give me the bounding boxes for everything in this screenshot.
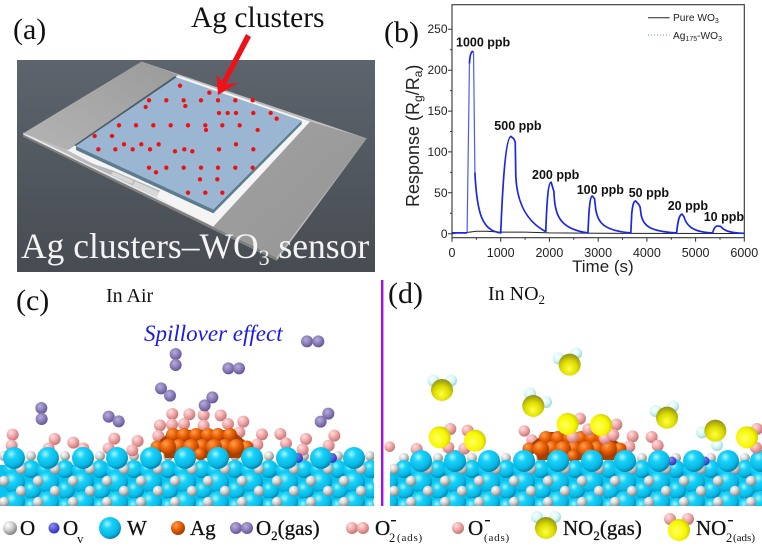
panel label: (c): (c) xyxy=(16,284,49,317)
panel: sensor device xyxy=(17,60,375,272)
y axis title: g xyxy=(411,95,425,102)
lower edge strip xyxy=(70,156,160,197)
adsorbed NO2 molecules xyxy=(429,413,762,455)
y tick labels: 200 xyxy=(427,63,448,77)
substrate xyxy=(67,75,310,227)
x tick labels: 3000 xyxy=(584,246,612,260)
NO2 gas molecules xyxy=(427,347,726,451)
x axis title: Time (s) xyxy=(572,257,634,276)
red Ag cluster dots xyxy=(92,83,279,195)
y axis title: /R xyxy=(403,77,423,95)
WO3 lattice xyxy=(0,447,374,506)
y tick labels: 50 xyxy=(434,186,448,200)
divider: purple line xyxy=(381,280,383,506)
y axis title: a xyxy=(411,70,425,77)
legend item: O adsorbed: (ads) xyxy=(484,532,510,544)
concentration labels: 20 ppb xyxy=(668,199,708,213)
panel label: (b): (b) xyxy=(384,16,419,49)
legend item: NO2 gas xyxy=(531,511,642,543)
legend item: O adsorbed xyxy=(452,516,510,544)
sensor caption: sensor xyxy=(270,226,369,266)
chart legend: Ag xyxy=(673,31,685,42)
sensor caption: Ag clusters–WO xyxy=(21,226,259,266)
chart legend: -WO xyxy=(697,31,718,42)
adsorbed O2 on surface xyxy=(6,408,340,456)
x tick labels: 1000 xyxy=(487,246,515,260)
sensing layer side xyxy=(76,121,302,213)
WO3 lattice back row xyxy=(399,453,750,461)
concentration labels: 1000 ppb xyxy=(456,36,511,50)
chart legend: 3 xyxy=(718,36,722,43)
legend item: O2 gas xyxy=(230,516,320,543)
heading: In Air: In Air xyxy=(106,285,154,307)
concentration labels: 50 ppb xyxy=(629,186,669,200)
annotation: Spillover effect: Spillover effect xyxy=(144,321,283,346)
legend item: NO2 gas: (gas) xyxy=(600,516,642,540)
x tick labels: 2000 xyxy=(535,246,563,260)
legend item: O2 gas: 2 xyxy=(271,528,278,543)
concentration labels xyxy=(456,36,744,224)
right electrode pad xyxy=(213,122,367,257)
y tick labels: 150 xyxy=(427,104,448,118)
left electrode pad xyxy=(23,62,178,150)
legend item: O: O xyxy=(20,516,35,540)
chart legend: Pure WO xyxy=(673,13,715,24)
Ag cluster xyxy=(150,428,254,460)
legend item: NO2 adsorbed: (ads) xyxy=(733,532,755,544)
legend item: NO2 adsorbed: NO xyxy=(696,516,726,540)
panel: surface in air xyxy=(0,335,374,506)
chart legend: 3 xyxy=(715,18,719,25)
x tick labels: 5000 xyxy=(682,246,710,260)
y tick labels: 100 xyxy=(427,145,448,159)
legend item: O2 adsorbed: (ads) xyxy=(397,532,423,544)
WO3 lattice back row xyxy=(0,451,375,461)
legend item: O xyxy=(3,516,35,540)
concentration labels: 200 ppb xyxy=(532,168,580,182)
y tick labels xyxy=(427,22,448,241)
concentration labels: 10 ppb xyxy=(704,210,744,224)
arrow: Ag clusters pointer xyxy=(216,34,251,95)
Ag cluster xyxy=(522,431,626,462)
y axis title: Response (R xyxy=(403,102,423,207)
x tick labels xyxy=(449,246,758,260)
y tick labels: 250 xyxy=(427,22,448,36)
legend item: O2 gas: (gas) xyxy=(278,516,320,540)
chart: gas response xyxy=(403,5,758,276)
sensing layer top xyxy=(76,77,302,209)
legend item: O2 adsorbed: 2 xyxy=(389,531,395,545)
response curves xyxy=(452,51,744,234)
y tick labels: 0 xyxy=(441,227,448,241)
legend item: Ag: Ag xyxy=(190,516,216,540)
background xyxy=(17,60,375,272)
chart legend: 175 xyxy=(685,36,697,43)
legend item: Ag xyxy=(171,516,216,540)
legend item: W xyxy=(99,516,147,540)
legend item: NO2 adsorbed: 2 xyxy=(726,531,732,545)
concentration labels: 100 ppb xyxy=(577,183,624,197)
chart legend xyxy=(648,13,722,43)
legend item: O2 adsorbed xyxy=(346,516,423,545)
O2 gas molecules xyxy=(35,335,334,428)
heading: In NO2: 2 xyxy=(539,292,545,307)
legend item: O adsorbed: O xyxy=(468,516,483,540)
heading: In NO2: In NO xyxy=(488,283,539,305)
concentration labels: 500 ppb xyxy=(494,119,542,133)
WO3 lattice xyxy=(390,450,762,506)
adsorbed oxygen xyxy=(384,425,664,455)
x tick labels: 6000 xyxy=(730,246,758,260)
axes frame xyxy=(452,5,744,238)
device base xyxy=(23,62,367,261)
legend item: Ov: O xyxy=(63,516,78,540)
legend xyxy=(3,511,755,546)
panel: surface in NO2 xyxy=(372,347,762,516)
panel label: (d): (d) xyxy=(388,277,423,310)
y axis title: ) xyxy=(403,65,423,71)
legend item: O2 gas: O xyxy=(256,516,271,540)
sensor caption: 3 xyxy=(259,245,270,270)
legend item: O2 adsorbed: O xyxy=(375,516,390,540)
legend item: Ov: v xyxy=(77,531,84,546)
legend item: NO2 gas: NO xyxy=(563,516,593,540)
legend item: NO2 gas: 2 xyxy=(593,528,600,543)
legend item: Ov xyxy=(48,516,84,546)
legend item: W: W xyxy=(127,516,147,540)
x tick labels: 0 xyxy=(449,246,456,260)
tick marks xyxy=(448,29,744,242)
panel label: (a): (a) xyxy=(13,13,46,46)
heading: Ag clusters: Ag clusters xyxy=(191,2,325,34)
x tick labels: 4000 xyxy=(633,246,661,260)
legend item: NO2 adsorbed xyxy=(664,513,755,545)
